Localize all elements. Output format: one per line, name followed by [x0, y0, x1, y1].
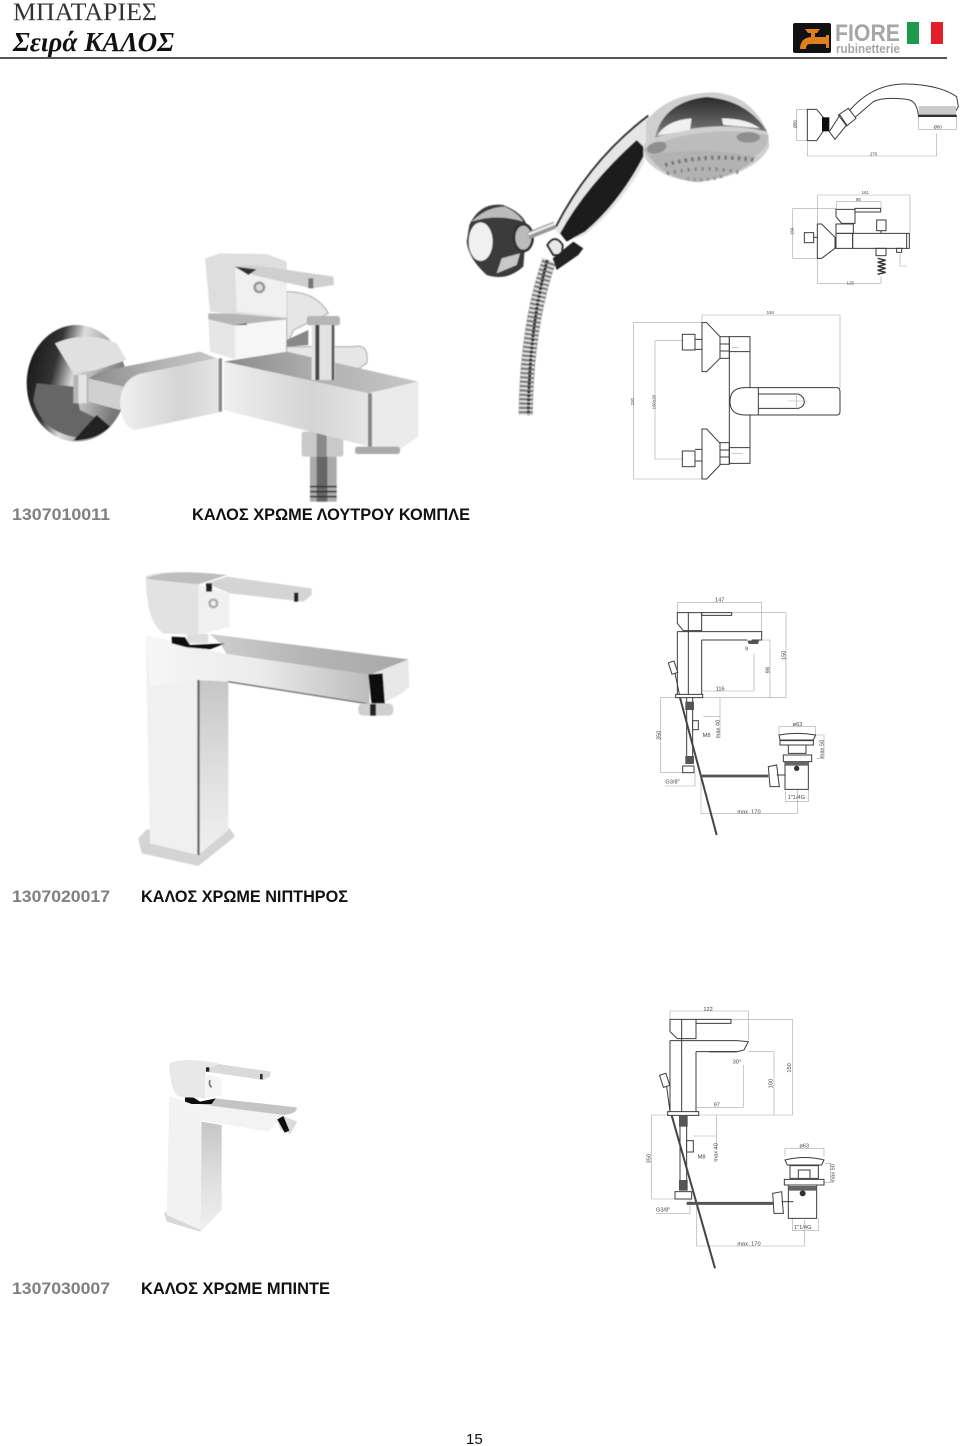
spout — [169, 1097, 297, 1134]
shower outline — [807, 84, 958, 141]
body — [146, 635, 228, 855]
dimension lines — [661, 602, 824, 813]
dimension labels: max 50 — [830, 1164, 836, 1183]
dimension labels: 97 — [714, 1103, 720, 1109]
gasket — [185, 1097, 216, 1104]
dimension labels: 98 — [766, 667, 772, 673]
mixer outline — [804, 208, 909, 274]
back oval — [287, 292, 367, 370]
base plate — [138, 829, 235, 866]
handle — [146, 572, 312, 635]
gasket — [172, 634, 225, 649]
wall rosette — [27, 325, 127, 442]
dimension labels: G3/8" — [656, 1208, 670, 1214]
dimension labels: M8 — [698, 1155, 706, 1161]
dimension labels: 150 — [787, 1063, 793, 1073]
dimension labels — [657, 598, 825, 816]
drawing: basin mixer dimensions — [657, 598, 825, 835]
dimension lines — [797, 109, 957, 156]
hose connector — [302, 432, 343, 502]
name: basin mixer: ΚΑΛΟΣ ΧΡΩΜΕ ΝΙΠΤΗΡΟΣ — [141, 887, 348, 906]
dimension labels: ø63 — [793, 722, 802, 728]
wall bracket — [467, 205, 555, 277]
dimension lines — [793, 195, 910, 283]
dimension labels — [647, 1007, 836, 1247]
code: bath mixer: 1307010011 — [12, 505, 110, 524]
dimension labels: 350 — [657, 731, 663, 740]
dimension labels: 147 — [715, 598, 724, 604]
logo: rubinetterie — [836, 41, 900, 56]
name: bath mixer: ΚΑΛΟΣ ΧΡΩΜΕ ΛΟΥΤΡΟΥ ΚΟΜΠΛΕ — [192, 505, 470, 524]
dimension labels: Ø80 — [793, 120, 798, 128]
dimension labels: max 40 — [716, 720, 722, 738]
dimension labels: 220 — [630, 398, 635, 405]
dimension labels: max 50 — [819, 740, 825, 758]
dimension labels: ø63 — [799, 1143, 809, 1149]
arm — [88, 352, 223, 430]
dimension labels: 100 — [769, 1079, 775, 1088]
handle — [169, 1060, 271, 1098]
drawing: bidet mixer dimensions — [647, 1007, 836, 1268]
dimension labels: 9 — [745, 647, 748, 653]
dimension labels: 122 — [703, 1007, 713, 1013]
dimension labels — [793, 120, 942, 156]
dimension labels — [789, 190, 869, 285]
shower head — [643, 92, 769, 182]
handle collar — [208, 313, 287, 359]
dimension labels: max. 170 — [737, 1241, 761, 1247]
handle — [547, 116, 655, 270]
dimension lines — [652, 1011, 831, 1246]
code: bidet mixer: 1307030007 — [12, 1279, 110, 1298]
dimension labels: G3/8" — [665, 780, 680, 786]
dimension labels: 85 — [856, 197, 861, 202]
drawing: hand shower dimensions — [793, 84, 958, 156]
dimension labels: 161 — [862, 190, 869, 195]
dimension labels: 1"1/4G — [794, 1225, 811, 1231]
base plate — [164, 1209, 222, 1232]
dimension labels: 350 — [647, 1154, 653, 1163]
dimension labels: 150 — [789, 227, 794, 235]
body — [167, 1098, 222, 1232]
dimension labels — [630, 310, 774, 409]
dimension labels: 150 — [782, 651, 788, 660]
photo: bidet mixer — [164, 1060, 297, 1232]
dimension labels: Ø80 — [934, 125, 942, 130]
dimension labels: 30° — [733, 1060, 741, 1066]
mixer outline — [682, 323, 840, 479]
spout — [219, 352, 418, 454]
dimension labels: 116 — [716, 686, 725, 692]
dimension labels: 270 — [870, 151, 878, 156]
logo — [793, 20, 943, 56]
dimension labels: 150±20 — [651, 394, 656, 409]
header — [0, 0, 947, 59]
flexible hose — [526, 260, 549, 415]
dimension labels: 1"1/4G — [788, 795, 805, 801]
photo: basin mixer — [138, 572, 409, 866]
mixer outline — [668, 613, 816, 835]
dimension labels: max 40 — [713, 1143, 719, 1162]
code: basin mixer: 1307020017 — [12, 887, 110, 906]
handle — [205, 253, 334, 318]
drawing: bath mixer plan view — [630, 310, 840, 479]
dimension labels: max. 170 — [737, 810, 761, 816]
header rule — [0, 57, 947, 59]
subtitle: Σειρά ΚΑΛΟΣ — [12, 27, 174, 57]
diverter knob — [287, 316, 340, 380]
dimension labels: M8 — [703, 733, 711, 739]
spout — [146, 634, 409, 716]
photo: hand shower with wall bracket — [467, 92, 769, 415]
name: bidet mixer: ΚΑΛΟΣ ΧΡΩΜΕ ΜΠΙΝΤΕ — [141, 1279, 330, 1298]
logo: FIORE — [835, 20, 900, 47]
dimension lines — [633, 315, 840, 479]
drawing: bath mixer side view — [789, 190, 910, 285]
mixer outline — [660, 1019, 824, 1268]
dimension labels: 125 — [847, 280, 854, 285]
dimension labels: 194 — [767, 310, 774, 315]
photo: wall-mounted bath mixer — [27, 253, 418, 502]
